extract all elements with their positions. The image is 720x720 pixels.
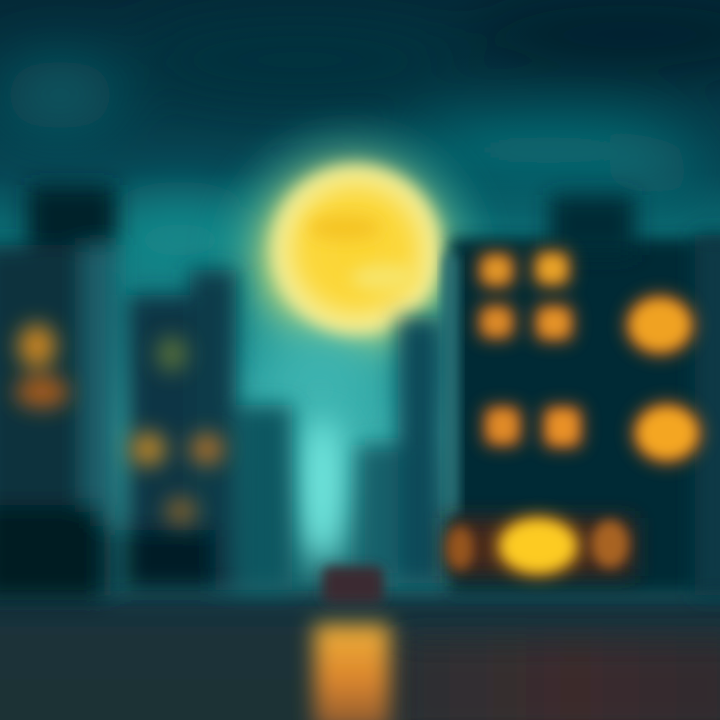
right building window glow [476,248,704,578]
road [0,594,720,720]
light shaft [296,418,348,562]
left buildings [0,185,292,600]
moon glow [202,108,502,408]
center tower [358,318,442,583]
moon [271,165,441,335]
road reflection [314,624,720,720]
car [322,566,384,604]
left building windows [15,324,224,525]
lower sky glow [250,320,390,460]
right building [444,195,720,595]
right building windows [446,255,696,571]
clouds [0,0,720,280]
